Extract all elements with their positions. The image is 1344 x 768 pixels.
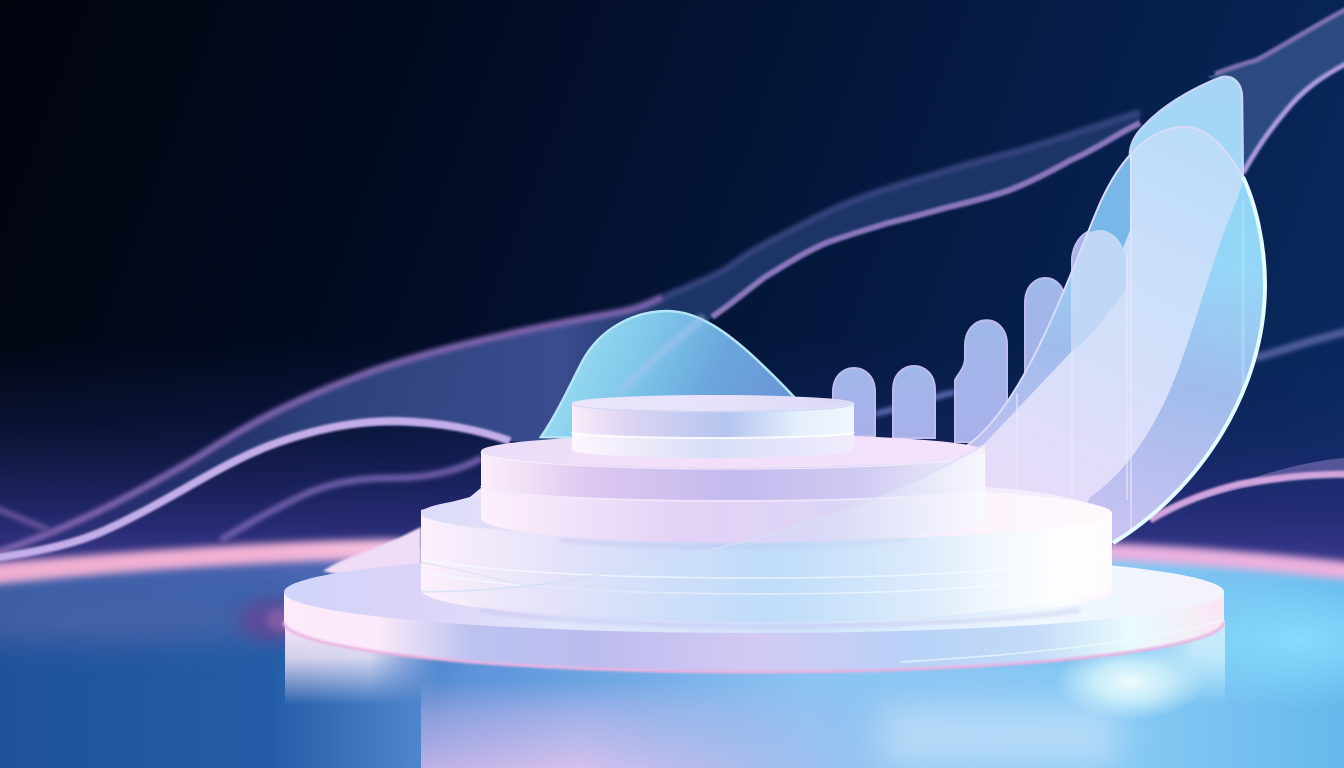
ribbon: left translucent fill: [0, 297, 712, 558]
crescent: tall back panel: [1130, 77, 1243, 190]
ribbon: mid right strand: [1255, 328, 1344, 358]
dome: light ribbon crossing: [618, 317, 704, 395]
chart shape: large glass crescent: [950, 77, 1265, 560]
podium tier: upper middle disc: [481, 434, 985, 547]
crescent: disc body: [960, 127, 1265, 543]
reflection: podium light on floor: [285, 620, 1225, 768]
crescent: left rim: [965, 127, 1243, 447]
crescent: right rim: [1113, 177, 1265, 543]
bar chart: rising glass bars: [833, 229, 1098, 442]
ribbon: lower right pink strand: [1150, 474, 1344, 520]
bar 4: [1025, 278, 1065, 400]
podium tier: lower middle disc: [421, 486, 1112, 626]
floor: reflective blue surface: [0, 548, 1344, 768]
ribbon: upper right top strand: [1215, 0, 1344, 74]
ribbon: central bright strand: [712, 123, 1140, 317]
bar 1: [833, 368, 875, 436]
podium tier: top disc: [572, 395, 854, 468]
ribbons: translucent flowing waves: [0, 0, 1344, 560]
ribbon: upper left strand: [0, 297, 663, 558]
ribbon: bright left strand: [0, 421, 510, 560]
horizon glow: pink light band: [0, 539, 1344, 588]
chart shape: blue glass dome: [541, 311, 794, 440]
ribbon: central faint strand: [663, 112, 1140, 297]
bar 3: [955, 320, 1007, 442]
ribbon: upper right fill: [1207, 10, 1344, 173]
glass sheet: diagonal sweep across podium: [421, 444, 1112, 625]
podium tier: bottom disc: [284, 551, 1224, 672]
ribbon: third left strand: [221, 458, 482, 540]
ribbon: central translucent fill: [663, 112, 1140, 317]
ribbon: lower right fill: [1150, 458, 1344, 520]
ribbon: short left strand: [0, 502, 48, 530]
glass sheet: rear sweep behind podium: [323, 487, 482, 595]
ribbon: upper right bright strand: [1243, 55, 1344, 173]
bar 5 back edge: [1072, 229, 1098, 300]
bar 2: [893, 366, 935, 438]
crescent: inner light layers: [980, 128, 1244, 529]
ribbon: strand behind bars: [875, 392, 955, 414]
